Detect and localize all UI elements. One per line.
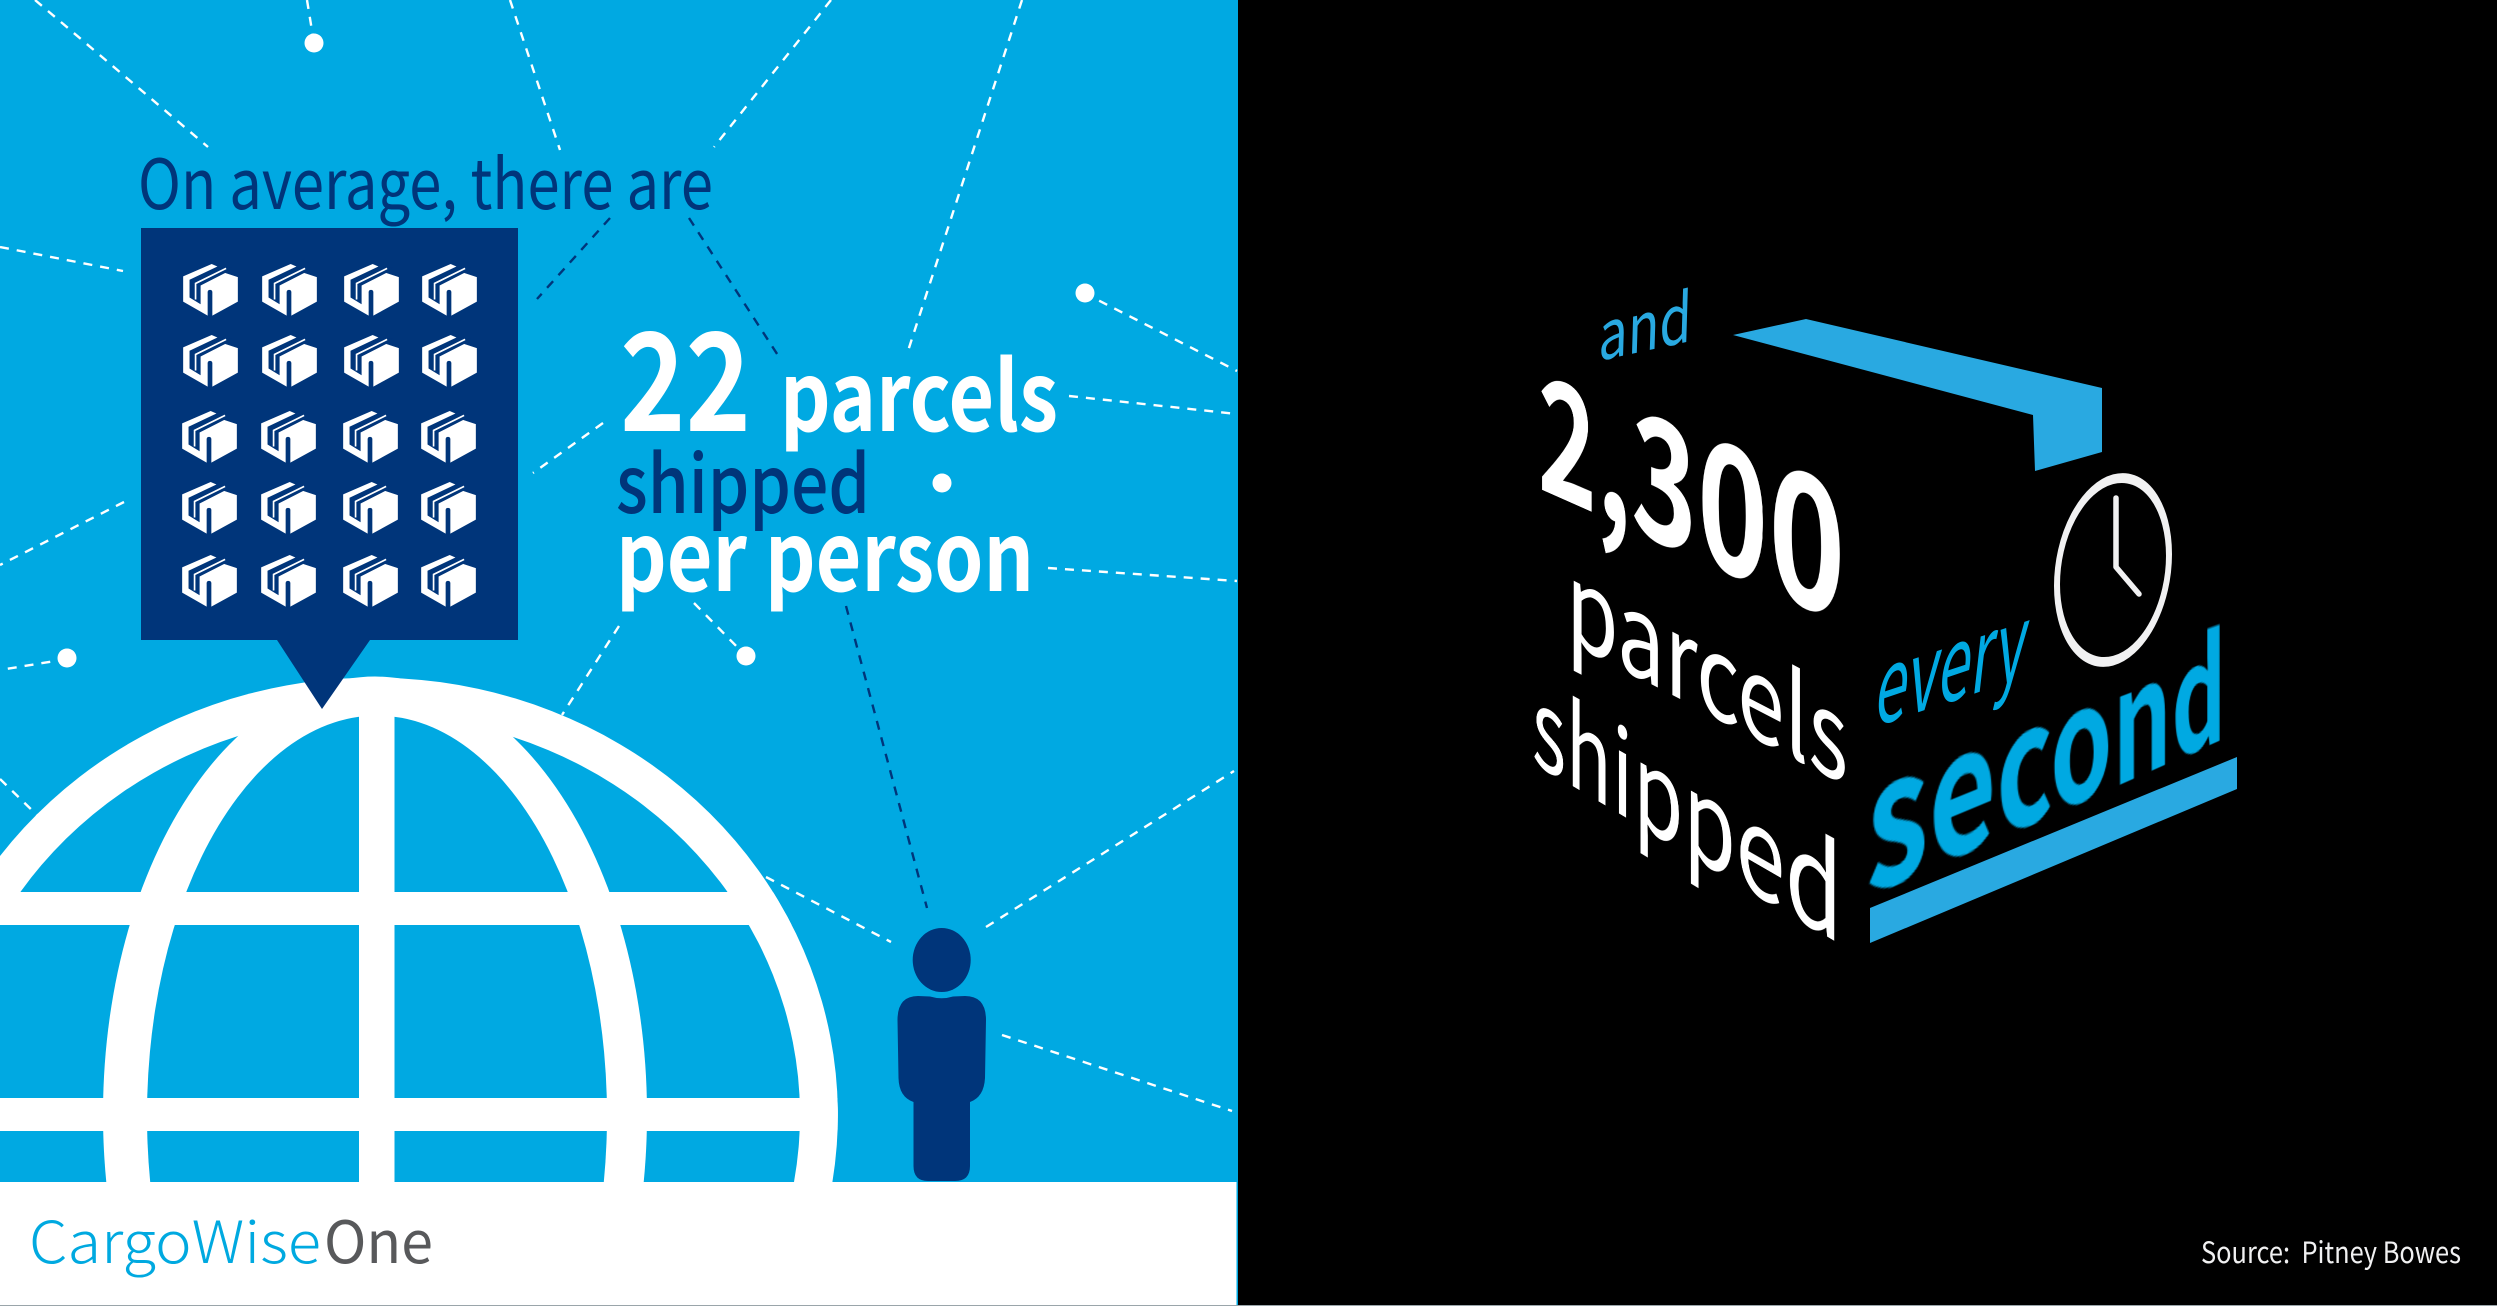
word: shipped in perspective: shipped	[1532, 634, 1590, 849]
number: 2,300 in perspective: 2,300	[1538, 306, 1551, 571]
box flap shape	[1733, 319, 2102, 471]
box base bar	[1870, 757, 2237, 943]
words: per person: per person	[616, 480, 1034, 619]
logo: CargoWise One: One	[324, 1196, 433, 1280]
statistic: 22 parcels shipped per person	[616, 274, 1058, 619]
number: 22: 22	[620, 274, 751, 471]
word: parcels on box side: parcels	[1566, 505, 1848, 820]
logo: CargoWise One: CargoWise	[29, 1196, 321, 1280]
icon grid: twenty parcels	[182, 264, 477, 607]
bottom edge line	[0, 1305, 2497, 1306]
word: second in perspective: second	[1866, 684, 2497, 991]
source note: Source: Pitney Bowes	[2201, 1230, 2461, 1272]
word: every: every	[1870, 555, 2038, 758]
panel: white logo bar	[0, 1182, 1236, 1306]
word: parcels: parcels	[780, 320, 1058, 459]
word: and: and	[1597, 261, 1693, 381]
panel: blue background	[0, 0, 1238, 1306]
word: shipped: shipped	[616, 421, 870, 537]
icon: clock	[2057, 464, 2169, 676]
icon: person	[898, 928, 986, 1181]
callout: navy speech box	[141, 228, 518, 709]
icon: globe	[0, 677, 840, 1182]
network of dashed connection lines and dots	[0, 0, 1237, 1111]
heading: on average: On average, there are	[138, 129, 713, 229]
logo: CargoWise One	[29, 1196, 433, 1280]
network node dots	[58, 34, 1094, 668]
